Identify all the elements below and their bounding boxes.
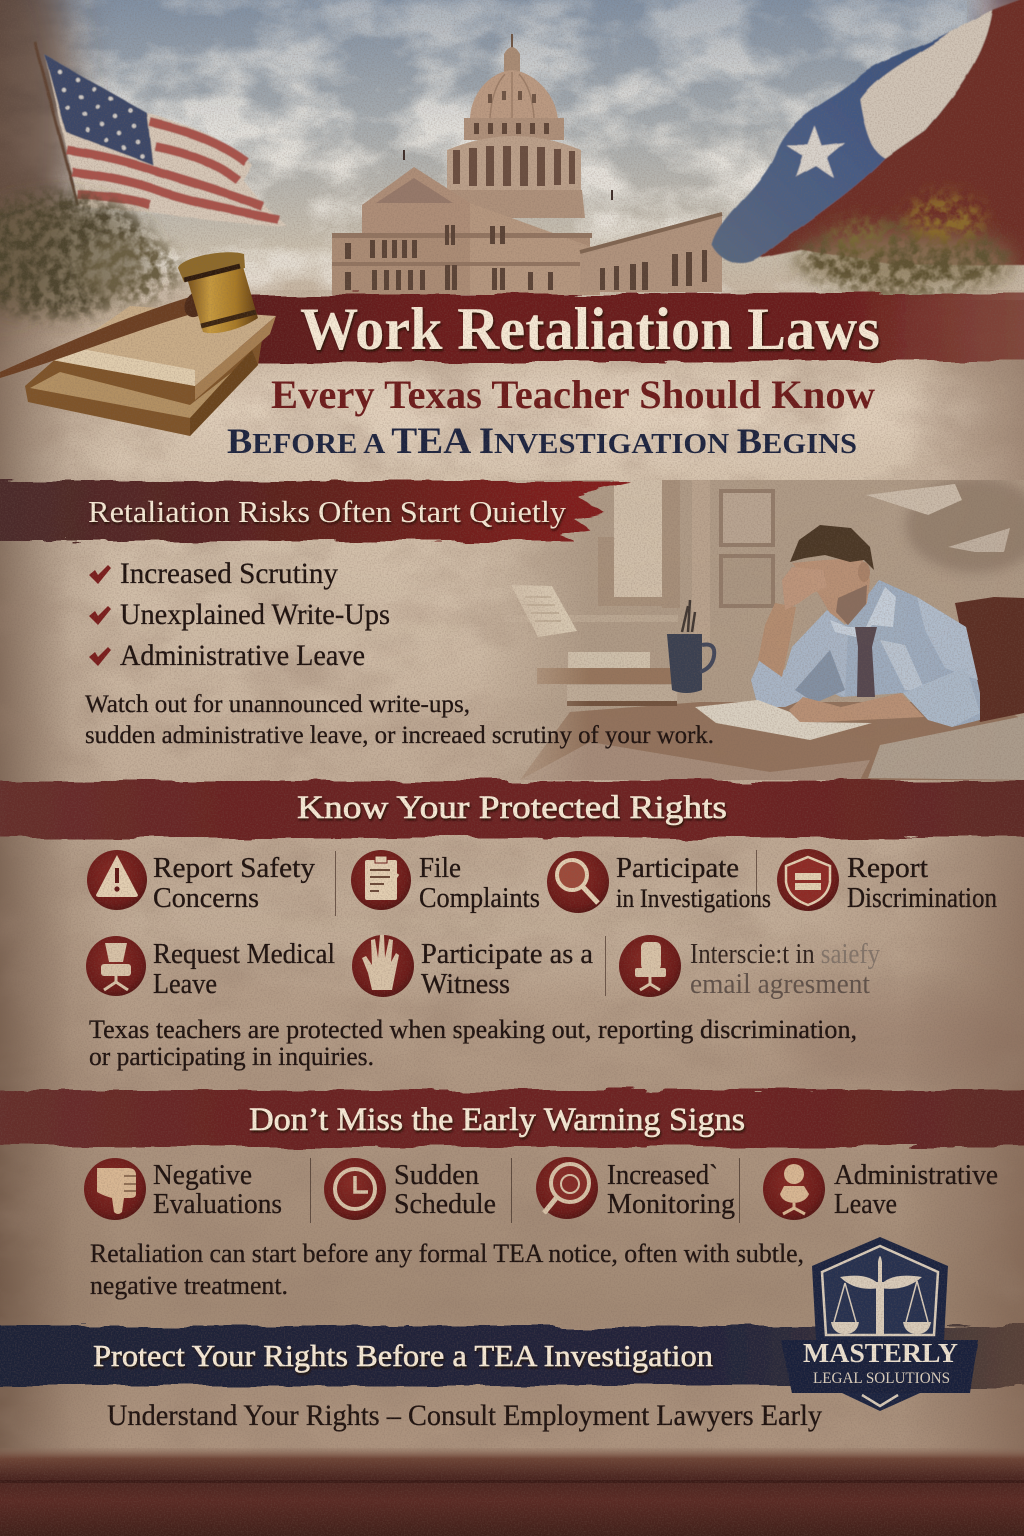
banner: protected rights xyxy=(0,781,1024,838)
label: file complaints: Complaints xyxy=(419,883,540,914)
label: negative evaluations: Evaluations xyxy=(153,1189,282,1220)
check mark icon xyxy=(89,565,111,584)
bottom wood ledge xyxy=(0,1448,1024,1536)
banner: protect your rights xyxy=(0,1326,1024,1386)
label: garbled agreement text xyxy=(690,939,880,1000)
label: report safety concerns: Concerns xyxy=(153,883,259,914)
illustration: left foliage xyxy=(0,193,180,317)
forearm up to head xyxy=(758,603,796,677)
label: garbled agreement text: email agresment xyxy=(690,969,870,1000)
label: participate in investigations: in Investigations xyxy=(616,884,771,913)
label: garbled agreement text: Interscie:t in saiefy xyxy=(690,939,880,970)
item text: Administrative Leave xyxy=(120,639,365,672)
label: request medical leave: Leave xyxy=(153,969,217,1000)
icon: warning triangle xyxy=(87,850,147,910)
banner text: Don’t Miss the Early Warning Signs xyxy=(249,1102,745,1138)
call to action: Understand Your Rights – Consult Employment Lawyers Early xyxy=(107,1399,822,1432)
paragraph: Texas teachers are protected: or participating in inquiries. xyxy=(89,1042,374,1071)
label: sudden schedule: Schedule xyxy=(394,1189,496,1220)
illustration: Texas flag xyxy=(712,0,1024,265)
paragraph: Texas teachers are protected: Texas teachers are protected when speaking out, reporting discrimination, xyxy=(89,1015,857,1044)
left sleeve xyxy=(751,610,848,707)
face xyxy=(792,558,870,625)
label: report discrimination: Discrimination xyxy=(847,883,997,914)
icon: shield xyxy=(777,849,839,911)
label: file complaints xyxy=(419,853,540,914)
papers xyxy=(695,700,872,740)
icon: monitoring magnifier xyxy=(536,1157,598,1219)
paragraph: watch out: Watch out for unannounced write-ups, xyxy=(85,691,470,718)
banner text: Know Your Protected Rights xyxy=(297,790,727,826)
label: request medical leave: Request Medical xyxy=(153,939,335,970)
label: request medical leave xyxy=(153,939,335,1000)
check mark icon xyxy=(89,606,111,625)
warning signs row xyxy=(84,1157,998,1223)
label: negative evaluations: Negative xyxy=(153,1160,252,1191)
label: administrative leave xyxy=(834,1160,998,1220)
checklist: retaliation risks xyxy=(89,557,390,672)
desk xyxy=(520,702,1024,780)
label: negative evaluations xyxy=(153,1160,282,1220)
label: administrative leave: Leave xyxy=(834,1189,897,1220)
rights row two xyxy=(86,935,880,1000)
label: report safety concerns xyxy=(153,853,315,914)
illustration: books and gavel xyxy=(0,252,276,436)
paragraph: retaliation can start: Retaliation can start before any formal TEA notice, often with subtle, xyxy=(90,1239,804,1268)
label: report safety concerns: Report Safety xyxy=(153,853,315,884)
banner: early warning signs xyxy=(0,1090,1024,1147)
right arm xyxy=(789,693,924,723)
icon: raised hand xyxy=(352,935,414,997)
label: participate as a witness xyxy=(421,939,594,1000)
paragraph: Texas teachers are protected xyxy=(89,1015,857,1071)
label: increased monitoring: Monitoring xyxy=(607,1189,735,1220)
illustration: stressed teacher at desk xyxy=(480,477,1024,780)
icon: administrative leave chair xyxy=(763,1158,825,1220)
label: participate in investigations: Participate xyxy=(616,853,739,884)
label: sudden schedule xyxy=(394,1160,496,1220)
title text: Work Retaliation Laws xyxy=(300,296,880,362)
label: administrative leave: Administrative xyxy=(834,1160,998,1191)
torso xyxy=(827,580,980,727)
label: participate as a witness: Participate as a xyxy=(421,939,594,970)
label: sudden schedule: Sudden xyxy=(394,1160,479,1191)
rights row one xyxy=(87,849,997,916)
logo tagline: LEGAL SOLUTIONS xyxy=(813,1370,950,1387)
item text: Unexplained Write-Ups xyxy=(120,598,390,631)
logo name: MASTERLY xyxy=(803,1338,958,1368)
tie xyxy=(855,627,877,697)
collar xyxy=(830,587,896,638)
icon: office chair xyxy=(619,935,681,997)
item text: Increased Scrutiny xyxy=(120,557,338,590)
banner: retaliation risks xyxy=(0,481,630,541)
subtitle: every Texas teacher: Every Texas Teacher Should Know xyxy=(271,372,875,417)
icon: clipboard xyxy=(351,850,411,910)
illustration: right foliage xyxy=(795,194,1015,294)
banner text: Protect Your Rights Before a TEA Investigation xyxy=(93,1338,714,1373)
logo: Masterly Legal Solutions xyxy=(781,1237,978,1411)
paragraph: watch out xyxy=(85,691,714,749)
icon: magnifying glass xyxy=(547,851,609,913)
label: report discrimination xyxy=(847,853,997,914)
hair xyxy=(790,525,874,570)
label: participate as a witness: Witness xyxy=(421,969,510,1000)
paragraph: retaliation can start xyxy=(90,1239,804,1300)
label: file complaints: File xyxy=(419,853,461,884)
illustration: Texas Capitol building xyxy=(332,34,722,295)
banner: main title xyxy=(240,294,1024,362)
label: increased monitoring: Increased` xyxy=(607,1160,718,1191)
paragraph: retaliation can start: negative treatment. xyxy=(90,1271,288,1300)
icon: clock xyxy=(324,1158,386,1220)
hand on forehead xyxy=(782,567,816,610)
check mark icon xyxy=(89,647,111,666)
label: report discrimination: Report xyxy=(847,853,928,884)
label: participate in investigations xyxy=(616,853,771,913)
icon: chair xyxy=(86,936,146,996)
subtitle: before a TEA investigation: BEFORE A TEA INVESTIGATION BEGINS xyxy=(227,421,857,462)
icon: thumbs down xyxy=(84,1158,146,1220)
label: increased monitoring xyxy=(607,1160,735,1220)
illustration: American flag xyxy=(35,42,287,226)
paragraph: watch out: sudden administrative leave, or increaed scrutiny of your work. xyxy=(85,722,714,749)
banner text: Retaliation Risks Often Start Quietly xyxy=(88,494,567,529)
